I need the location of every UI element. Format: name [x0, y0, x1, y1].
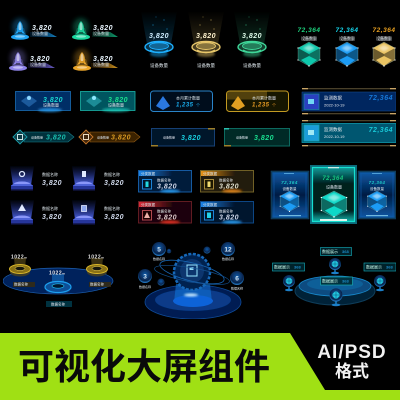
card: gold: 分类数据 — [203, 171, 217, 176]
cube card: right: 设备数量 — [370, 186, 384, 191]
rocket tile: purple: 设备数量 — [30, 61, 46, 67]
card: gold: 数据名称 — [219, 178, 233, 182]
rocket tile: blue — [11, 18, 57, 40]
arrow tag: orange: 3,820 — [111, 134, 131, 142]
pedestal stat 2: 数据名称 — [104, 171, 120, 177]
ring node: right gold — [86, 254, 111, 287]
data pin: center: 368 — [342, 278, 349, 284]
cube stat: blue: 72,364 — [336, 27, 358, 34]
ring node: left gold — [10, 254, 35, 287]
cube card: left — [272, 172, 308, 218]
data pin: right: 数据展示 — [366, 264, 382, 270]
rocket tile: green: 设备数量 — [93, 30, 109, 36]
framed stat: navy: 3,820 — [181, 135, 201, 142]
ring node: center blue: 1022m — [49, 270, 65, 276]
cube stat: green: 72,364 — [298, 27, 320, 34]
panel: date stat blue: 2022-10-19 — [324, 102, 345, 108]
card: blue: 分类数据 — [141, 171, 155, 176]
rocket tile: purple: 3,820 — [30, 56, 50, 63]
panel: teal stat: 设备数量 — [108, 102, 124, 108]
card: blue — [138, 170, 192, 192]
data pin: center — [320, 277, 352, 306]
panel: date stat blue: 监测数据 — [324, 94, 342, 102]
panel: gold rounded — [226, 91, 288, 112]
panel: blue stat: 3,820 — [43, 97, 63, 104]
pedestal stat 3 — [10, 200, 62, 224]
ring node: center blue — [45, 270, 72, 307]
pedestal stat 3: 3,820 — [42, 214, 62, 221]
ring node: right gold: 数据名称 — [90, 282, 104, 286]
data platform — [272, 248, 396, 306]
card: blue: 数据名称 — [157, 178, 171, 182]
orbit node 5: 数据名称 — [153, 256, 165, 261]
panel: date stat blue — [302, 88, 396, 114]
pedestal stat 4 — [72, 200, 124, 224]
orbit node 5: 5 — [157, 246, 161, 254]
orbit node 6 — [230, 271, 244, 290]
rocket tile: green: 3,820 — [93, 25, 113, 32]
ring pedestal: green: 3,820 — [242, 33, 262, 40]
data pin: top: 数据展示 — [322, 248, 338, 254]
pedestal stat 4: 数据名称 — [104, 205, 120, 211]
small orbit balls — [158, 246, 210, 286]
footer banner — [0, 333, 400, 400]
panel: blue stat — [16, 92, 70, 112]
ring pedestal: gold: 3,820 — [196, 33, 216, 40]
cube stat: green — [297, 27, 321, 67]
arrow tag: orange — [79, 130, 140, 144]
card: blue: 3,820 — [157, 184, 177, 190]
map platform with rings — [3, 254, 113, 307]
rocket tile: blue: 3,820 — [32, 25, 52, 32]
pedestal stat 2: 3,820 — [104, 180, 124, 187]
pedestal stat 4: 3,820 — [104, 214, 124, 221]
rocket tile: green — [72, 18, 118, 40]
data pin: right — [364, 263, 396, 291]
arrow tag: teal: 设备数量 — [31, 134, 43, 140]
panel: gold rounded: 1,235 — [252, 102, 270, 108]
rocket tile: gold — [73, 49, 118, 71]
ring pedestal: blue: 设备数量 — [150, 62, 168, 69]
framed stat: green: 设备数量 — [236, 134, 248, 140]
arrow tag: teal — [13, 130, 74, 144]
cube stat: gold: 72,364 — [373, 27, 395, 34]
panel: blue rounded: 1,235 — [176, 102, 194, 108]
framed stat: green: 3,820 — [254, 135, 274, 142]
cube card: center highlighted: 72,364 — [322, 176, 344, 182]
ring node: left gold: 数据名称 — [14, 282, 28, 286]
card: red: 分类数据 — [141, 202, 155, 207]
pedestal stat 1: 3,820 — [42, 180, 62, 187]
panel: date stat teal: 72,364 — [369, 127, 393, 134]
rocket tile: blue: 设备数量 — [32, 30, 48, 36]
pedestal stat 1: 数据名称 — [42, 171, 58, 177]
data pin: left: 368 — [294, 264, 301, 270]
panel: date stat teal: 监测数据 — [324, 126, 342, 133]
ring pedestal: blue: 3,820 — [149, 33, 169, 40]
orbit node 12 — [221, 242, 235, 261]
data pin: left — [272, 263, 304, 291]
hologram globe platform — [145, 254, 241, 319]
cube card: left: 72,364 — [281, 180, 298, 185]
panel: gold rounded: 个 — [272, 102, 276, 108]
framed stat: navy — [151, 128, 215, 146]
data pin: right: 368 — [386, 264, 393, 270]
orbit node 3: 3 — [143, 274, 147, 280]
format badge: AI/PSD — [317, 342, 387, 363]
framed stat: navy: 设备数量 — [163, 134, 175, 140]
data pin: center: 数据展示 — [322, 278, 338, 284]
rocket tile: gold: 设备数量 — [93, 61, 109, 67]
orbit node 6: 6 — [235, 276, 239, 282]
rocket tile: gold: 3,820 — [93, 56, 113, 63]
cube stat: blue — [335, 27, 359, 67]
cube stat: gold: 设备数量 — [376, 35, 392, 41]
panel: blue rounded: 本月累计数量 — [176, 94, 200, 100]
orbit node 6: 数据名称 — [231, 286, 243, 290]
panel: teal stat: 3,820 — [108, 97, 128, 104]
cube stat: blue: 设备数量 — [339, 35, 355, 41]
card: red: 数据名称 — [157, 208, 171, 214]
ring pedestal: blue — [141, 11, 177, 69]
panel: gold rounded: 本月累计数量 — [252, 94, 276, 100]
card: gold — [200, 170, 254, 192]
ring pedestal: green: 设备数量 — [243, 62, 261, 69]
format badge: 格式 — [335, 362, 369, 381]
orbit node 12: 数据名称 — [222, 256, 234, 261]
orbit node 3: 数据名称 — [139, 284, 151, 289]
panel: blue rounded: 个 — [196, 102, 200, 108]
panel: teal stat — [80, 92, 135, 112]
panel: date stat blue: 72,364 — [369, 95, 393, 102]
card: azure: 分类数据 — [203, 202, 217, 207]
arrow tag: teal: 3,820 — [46, 134, 66, 142]
pedestal stat 3: 数据名称 — [42, 205, 58, 211]
pedestal stat 1 — [10, 166, 62, 190]
dashboard components — [3, 11, 396, 319]
panel: blue rounded — [150, 91, 212, 112]
card: azure: 3,820 — [219, 214, 239, 222]
orbit node 5 — [152, 242, 166, 261]
cube card: center highlighted: 设备数量 — [326, 184, 342, 190]
orbit node 12: 12 — [224, 246, 232, 254]
card: azure — [200, 202, 254, 224]
data pin: left: 数据展示 — [274, 264, 290, 270]
format badge — [317, 342, 387, 381]
card: red: 3,820 — [157, 214, 177, 222]
title: 可视化大屏组件 — [18, 346, 270, 387]
cube card: right: 72,364 — [369, 180, 385, 185]
panel: blue stat: 设备数量 — [43, 102, 59, 108]
pedestal stat 2 — [72, 166, 124, 190]
cube card: center highlighted — [311, 166, 356, 223]
ring node: left gold: 1022m — [11, 254, 27, 260]
cube card: right — [358, 172, 396, 218]
card: azure: 数据名称 — [219, 208, 233, 214]
ring pedestal: gold: 设备数量 — [197, 62, 215, 69]
cube stat: gold — [372, 27, 396, 67]
rocket tile: purple — [9, 49, 55, 71]
data pin: top: 368 — [342, 249, 349, 254]
ring node: center blue: 数据名称 — [51, 302, 65, 306]
ring node: right gold: 1022m — [88, 254, 104, 260]
ring pedestal: gold — [188, 11, 224, 69]
framed stat: green — [224, 128, 290, 146]
cube stat: green: 设备数量 — [301, 35, 317, 41]
card: gold: 3,820 — [219, 184, 239, 190]
ring pedestal: green — [234, 11, 270, 69]
panel: date stat teal: 2022-10-19 — [324, 134, 345, 139]
orbit node 3 — [138, 269, 152, 289]
data pin: top — [320, 248, 352, 274]
arrow tag: orange: 设备数量 — [97, 134, 109, 140]
card: red — [138, 202, 192, 224]
cube card: left: 设备数量 — [282, 186, 297, 191]
panel: date stat teal — [302, 120, 396, 146]
